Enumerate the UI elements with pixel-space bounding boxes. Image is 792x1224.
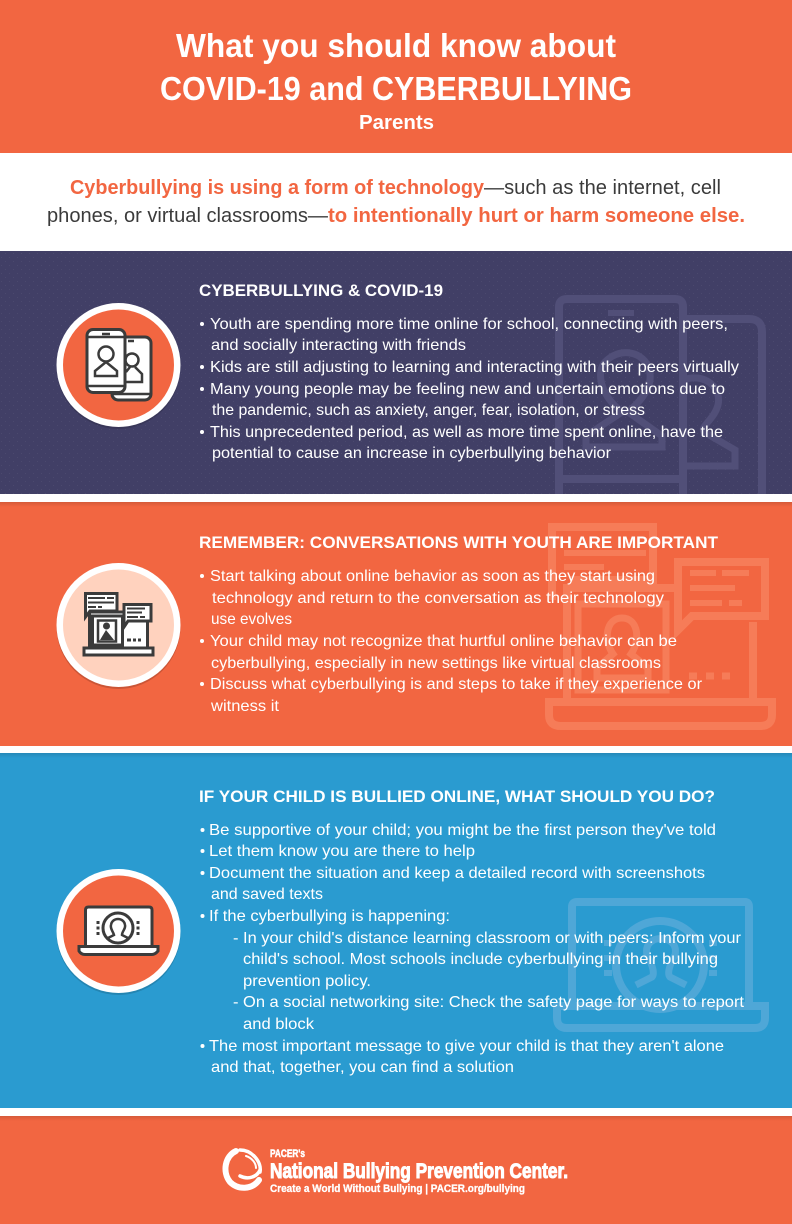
- bullet list: Many young people may be feeling new and uncertain emotions due to: [210, 381, 725, 398]
- bullet list: and saved texts: [211, 886, 323, 903]
- bullet list: child's school. Most schools include cyberbullying in their bullying: [243, 951, 718, 968]
- bullet list: [200, 822, 745, 1076]
- bullet list: This unprecedented period, as well as more time spent online, have the: [210, 424, 723, 441]
- bullet list: and that, together, you can find a solution: [211, 1059, 514, 1076]
- definition text block: phones, or virtual classrooms—: [47, 205, 328, 227]
- watermark icon: laptop with profile: [557, 902, 765, 1028]
- definition text block: Cyberbullying is using a form of technology: [70, 177, 485, 199]
- panel: if your child is bullied online: [0, 753, 792, 1108]
- logo: organisation name: PACER's: [270, 1148, 305, 1160]
- title line 1: What you should know about: [176, 27, 616, 64]
- bullet list: Discuss what cyberbullying is and steps to take if they experience or: [210, 676, 703, 693]
- subtitle: Parents: [359, 112, 434, 134]
- icon: laptop with chat bubbles: [56, 563, 180, 689]
- title line 2: COVID-19 and CYBERBULLYING: [160, 70, 632, 107]
- bullet list: potential to cause an increase in cyberbullying behavior: [212, 445, 612, 462]
- bullet list: Kids are still adjusting to learning and interacting with their peers virtually: [210, 359, 739, 376]
- logo: organisation name: Create a World Without Bullying | PACER.org/bullying: [270, 1183, 525, 1195]
- panel: conversations with youth: [0, 502, 792, 746]
- definition text block: —such as the internet, cell: [484, 177, 721, 199]
- header panel: [0, 0, 792, 153]
- bullet list: - In your child's distance learning classroom or with peers: Inform your: [233, 930, 742, 947]
- heading: IF YOUR CHILD IS BULLIED ONLINE, WHAT SHOULD YOU DO?: [199, 788, 715, 806]
- panel: cyberbullying and covid-19: [0, 251, 792, 494]
- bullet list: and socially interacting with friends: [211, 337, 466, 354]
- bullet list: If the cyberbullying is happening:: [209, 908, 450, 925]
- bullet list: The most important message to give your child is that they aren't alone: [209, 1038, 724, 1055]
- heading: REMEMBER: CONVERSATIONS WITH YOUTH ARE IMPORTANT: [199, 534, 718, 552]
- bullet list: cyberbullying, especially in new settings like virtual classrooms: [211, 655, 661, 672]
- bullet list: technology and return to the conversation as their technology: [212, 590, 664, 607]
- icon: two phones with user profiles: [56, 303, 180, 429]
- heading: CYBERBULLYING & COVID-19: [199, 282, 443, 300]
- bullet list: prevention policy.: [243, 973, 371, 990]
- bullet list: [200, 568, 703, 715]
- bullet list: - On a social networking site: Check the safety page for ways to report: [233, 994, 745, 1011]
- bullet list: witness it: [210, 698, 280, 715]
- definition text block: to intentionally hurt or harm someone else.: [328, 205, 745, 227]
- logo: swirl mark: [225, 1150, 260, 1188]
- logo: organisation name: National Bullying Prevention Center.: [270, 1160, 568, 1183]
- watermark icon: laptop with chat bubbles: [549, 527, 772, 726]
- bullet list: the pandemic, such as anxiety, anger, fear, isolation, or stress: [212, 402, 645, 419]
- icon: laptop with profile: [56, 869, 180, 995]
- bullet list: [200, 316, 739, 462]
- watermark icon: phones: [559, 299, 762, 494]
- bullet list: Document the situation and keep a detailed record with screenshots: [209, 865, 705, 882]
- bullet list: use evolves: [211, 611, 292, 628]
- definition text block: [47, 177, 745, 227]
- bullet list: and block: [243, 1016, 315, 1033]
- logo: organisation name: [270, 1148, 568, 1195]
- bullet list: Your child may not recognize that hurtful online behavior can be: [210, 633, 677, 650]
- footer panel: [0, 1116, 792, 1224]
- bullet list: Be supportive of your child; you might be the first person they've told: [209, 822, 716, 839]
- bullet list: Start talking about online behavior as soon as they start using: [210, 568, 655, 585]
- bullet list: Let them know you are there to help: [209, 843, 475, 860]
- bullet list: Youth are spending more time online for school, connecting with peers,: [210, 316, 728, 333]
